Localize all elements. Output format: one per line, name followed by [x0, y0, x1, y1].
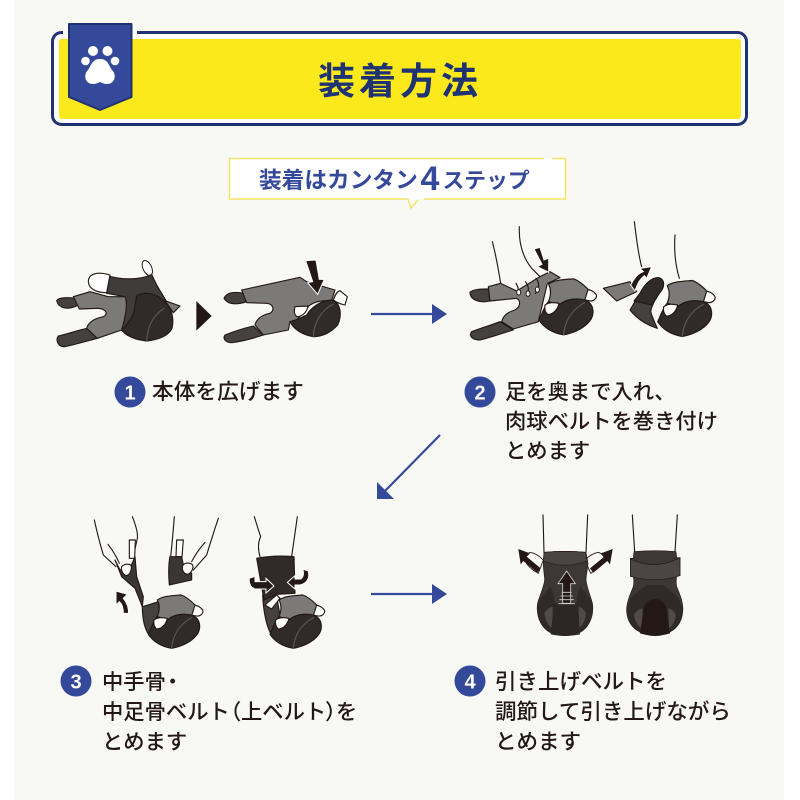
callout: 4 steps: 装着はカンタン	[259, 167, 418, 193]
step 3 text: 3	[70, 672, 82, 694]
step 2 text: とめます	[505, 439, 590, 463]
illustration: step 3	[94, 517, 325, 648]
callout: 4 steps: 4	[420, 160, 440, 198]
step 4 text: 調節して引き上げながら	[495, 700, 731, 724]
step 4 text	[454, 666, 731, 754]
step 3 text: を	[336, 700, 357, 724]
step 3 text: 中足骨ベルト	[102, 700, 230, 724]
step 3 text: ）	[325, 700, 346, 724]
step 3 text: 中手骨	[102, 670, 166, 694]
step 3 text: 上ベルト	[241, 700, 326, 724]
arrow: step 3 to step 4	[371, 584, 447, 604]
title banner	[52, 29, 746, 124]
step 3 text	[60, 666, 357, 754]
step 1 text: 1	[124, 382, 136, 404]
step 4 text: とめます	[495, 730, 581, 754]
step 2 text	[464, 376, 718, 463]
heading: 装着方法	[318, 61, 482, 102]
step 3 text: ・	[162, 670, 183, 694]
step 2 text: 2	[474, 382, 486, 404]
callout: 4 steps: ステップ	[442, 168, 530, 193]
arrow: step 1 to step 2	[371, 304, 447, 324]
step 4 text: 4	[464, 672, 476, 694]
step 1 text: 本体を広げます	[152, 379, 304, 404]
step 3 text: とめます	[102, 730, 187, 754]
illustration: step 4	[518, 515, 683, 636]
step 2 text: 足を奥まで入れ、	[505, 380, 676, 404]
illustration: step 1	[57, 259, 347, 347]
icon: paw badge	[69, 24, 132, 110]
step 1 text	[114, 376, 304, 408]
step 3 text: （	[220, 700, 241, 724]
step 2 text: 肉球ベルトを巻き付け	[505, 410, 718, 434]
step 4 text: 引き上げベルトを	[495, 670, 667, 694]
icon: triangle	[196, 301, 212, 331]
callout: 4 steps	[230, 158, 566, 208]
illustration: step 2	[470, 222, 715, 340]
arrow: step 2 to step 3	[377, 435, 440, 499]
